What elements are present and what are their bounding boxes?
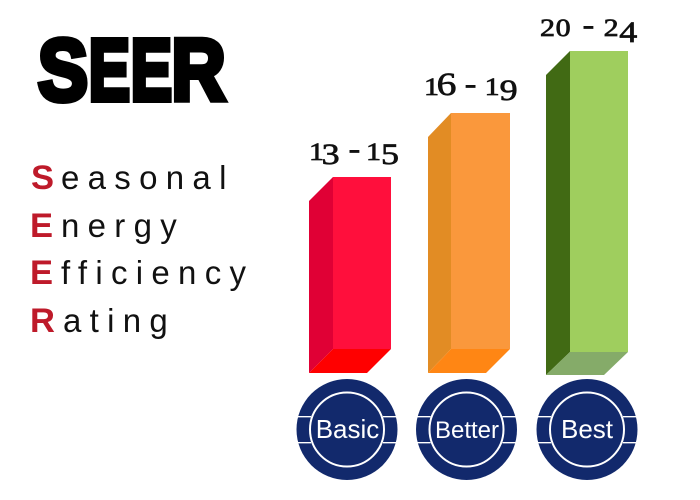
value label: 16 - 19: 6 (437, 66, 456, 102)
line: Seasonal: easonal (61, 159, 235, 196)
badge: Better: Better (435, 417, 499, 444)
value label: 13 - 15: - (349, 132, 360, 164)
title: E (89, 22, 130, 118)
value label: 20 - 24: - (583, 8, 594, 40)
title: S (38, 23, 88, 119)
value label: 16 - 19: - (465, 67, 476, 99)
line: Rating: R (30, 302, 55, 340)
badge: Basic (296, 379, 398, 480)
value label: 16 - 19: 1 (424, 72, 439, 100)
line: Efficiency: fficiency (61, 254, 254, 291)
value label: 13 - 15: 1 (309, 137, 324, 165)
bar: Better (428, 113, 510, 373)
badge: Better (416, 379, 517, 480)
value label: 20 - 24: 4 (619, 16, 638, 49)
line: Rating: ating (63, 302, 176, 339)
value label: 13 - 15: 1 (366, 137, 381, 165)
value label: 16 - 19: 9 (500, 74, 518, 107)
acronym list (30, 159, 254, 340)
badge: Best: Best (561, 414, 614, 444)
bar: Best (546, 51, 628, 375)
line: Energy: E (30, 207, 53, 245)
line: Seasonal: S (31, 159, 54, 197)
value label: 20 - 24: 2 (540, 13, 555, 41)
badge: Best (536, 379, 638, 480)
bar: Basic (309, 177, 391, 373)
line: Efficiency: E (30, 254, 53, 292)
value label: 20 - 24: 0 (556, 13, 571, 41)
badge: Basic: Basic (316, 414, 379, 444)
value label: 16 - 19: 1 (485, 72, 500, 100)
title: E (131, 22, 172, 118)
value label: 13 - 15: 3 (322, 138, 340, 171)
title (38, 22, 226, 119)
value label: 20 - 24: 2 (604, 13, 619, 41)
line: Energy: nergy (61, 207, 185, 244)
title: R (172, 23, 226, 119)
value label: 13 - 15: 5 (381, 138, 399, 171)
